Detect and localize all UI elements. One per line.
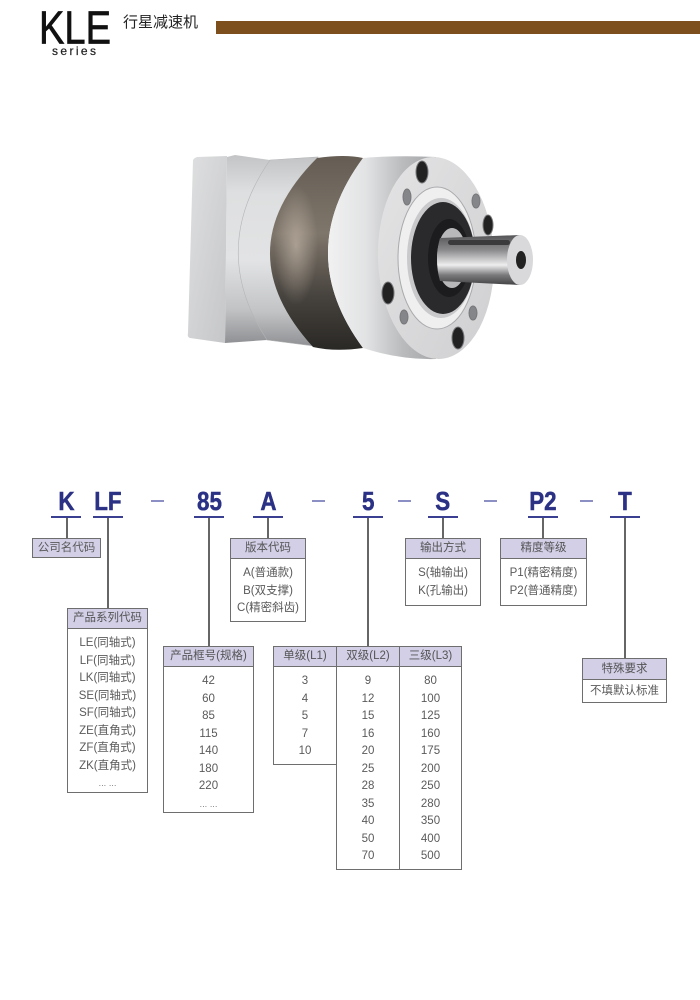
panel: single stage ratio: 单级(L1) (283, 650, 327, 662)
product image: planetary gearbox (188, 155, 533, 360)
panel: triple stage ratio: 100 (421, 692, 440, 704)
panel: single stage ratio: 5 (302, 710, 308, 722)
panel: triple stage ratio: 125 (421, 710, 440, 722)
panel: version code: A(普通款) (243, 567, 293, 579)
model code: S: S (436, 486, 450, 516)
model code: K: K (58, 486, 74, 516)
panel: triple stage ratio: 三级(L3) (409, 650, 452, 662)
panel: precision grade (500, 538, 587, 606)
panel: special requirements: 特殊要求 (602, 663, 648, 675)
panel: product series code: SE(同轴式) (79, 690, 136, 702)
panel: version code: B(双支撑) (243, 584, 293, 596)
model code: P2: P2 (529, 486, 557, 516)
panel: product series code: … … (98, 779, 117, 788)
panel: single stage ratio: 4 (302, 692, 308, 704)
panel: product series code: ZE(直角式) (79, 724, 136, 736)
panel: version code: 版本代码 (245, 542, 291, 554)
panel: double stage ratio: 28 (362, 780, 374, 792)
model code: A: A (260, 486, 276, 516)
panel: frame size: 180 (199, 762, 218, 774)
header bar (216, 21, 700, 34)
panel: company code: 公司名代码 (38, 542, 95, 554)
panel: special requirements (582, 658, 667, 703)
model code: 5: 5 (362, 486, 374, 516)
panel: precision grade: P1(精密精度) (510, 567, 577, 579)
panel: triple stage ratio: 175 (421, 745, 440, 757)
panel: triple stage ratio: 400 (421, 832, 440, 844)
panel: single stage ratio: 3 (302, 675, 308, 687)
panel: double stage ratio: 40 (362, 815, 374, 827)
panel: product series code: LF(同轴式) (80, 654, 135, 666)
panel: product series code (67, 608, 148, 793)
panel: double stage ratio (336, 646, 400, 870)
model code: T: T (618, 486, 632, 516)
panel: double stage ratio: 9 (365, 675, 371, 687)
panel: frame size: 42 (202, 675, 215, 687)
panel: single stage ratio (273, 646, 337, 765)
panel: frame size: 60 (202, 692, 215, 704)
panel: precision grade: 精度等级 (520, 542, 566, 554)
panel: product series code: ZK(直角式) (79, 760, 136, 772)
panel: triple stage ratio: 250 (421, 780, 440, 792)
panel: triple stage ratio: 80 (424, 675, 437, 687)
panel: special requirements: 不填默认标准 (590, 685, 659, 697)
panel: frame size: 140 (199, 745, 218, 757)
panel: frame size: … … (199, 800, 218, 808)
panel: product series code: 产品系列代码 (73, 612, 142, 624)
panel: single stage ratio: 10 (299, 745, 311, 757)
panel: triple stage ratio: 200 (421, 762, 440, 774)
panel: product series code: LE(同轴式) (79, 637, 136, 649)
panel: output type (405, 538, 481, 606)
panel: version code (230, 538, 306, 622)
panel: double stage ratio: 35 (362, 798, 374, 810)
panel: company code (32, 538, 101, 558)
model code: 85: 85 (197, 486, 221, 516)
panel: frame size: 220 (199, 780, 218, 792)
icon: bolt holes (382, 161, 493, 349)
panel: frame size (163, 646, 254, 813)
panel: version code: C(精密斜齿) (237, 602, 299, 614)
panel: triple stage ratio: 160 (421, 728, 440, 740)
panel: double stage ratio: 15 (362, 710, 374, 722)
panel: product series code: ZF(直角式) (79, 742, 136, 754)
panel: triple stage ratio: 280 (421, 798, 440, 810)
logo: KLE series: series (52, 44, 96, 58)
panel: double stage ratio: 16 (362, 728, 374, 740)
panel: double stage ratio: 双级(L2) (346, 650, 390, 662)
panel: double stage ratio: 20 (362, 745, 374, 757)
panel: product series code: SF(同轴式) (79, 707, 136, 719)
panel: frame size: 产品框号(规格) (170, 650, 247, 662)
panel: double stage ratio: 50 (362, 832, 374, 844)
panel: frame size: 115 (199, 728, 218, 740)
panel: double stage ratio: 70 (362, 850, 374, 862)
panel: single stage ratio: 7 (302, 728, 308, 740)
panel: double stage ratio: 12 (362, 692, 374, 704)
panel: output type: K(孔输出) (418, 584, 468, 596)
panel: triple stage ratio: 500 (421, 850, 440, 862)
panel: frame size: 85 (202, 710, 215, 722)
icon: output shaft (437, 235, 533, 285)
icon: gearbox body (188, 155, 497, 361)
panel: product series code: LK(同轴式) (79, 672, 136, 684)
panel: double stage ratio: 25 (362, 762, 374, 774)
heading: product name: 行星减速机 (123, 14, 198, 30)
panel: triple stage ratio: 350 (421, 815, 440, 827)
panel: precision grade: P2(普通精度) (510, 584, 577, 596)
panel: output type: S(轴输出) (418, 567, 468, 579)
panel: triple stage ratio (399, 646, 462, 870)
panel: output type: 输出方式 (420, 542, 466, 554)
model code: LF: LF (94, 486, 122, 516)
